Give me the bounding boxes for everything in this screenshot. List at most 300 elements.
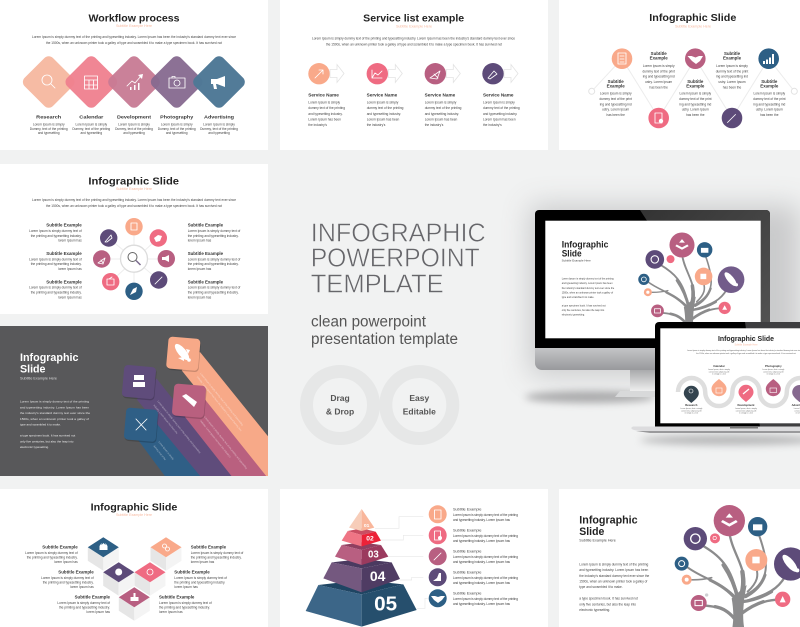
item labels	[453, 508, 482, 596]
heading: Slide	[20, 363, 46, 375]
right labels: lorem Ipsum has	[159, 610, 183, 614]
laptop step text	[680, 368, 800, 414]
item descriptions: Lorem Ipsum is simply dummy text of the printing	[453, 597, 518, 601]
body text: and typesetting industry. Lorem Ipsum has been	[579, 568, 649, 572]
step descriptions: Dummy, text of the printing	[200, 127, 238, 131]
laptop step text: consectetur adipiscing elit	[681, 409, 702, 412]
icon circle: service 1	[308, 63, 330, 84]
column titles	[607, 51, 779, 88]
column descriptions: Lorem Ipsum is simply	[716, 64, 748, 68]
tier 2: 02	[366, 536, 374, 543]
laptop step text: in simply is a text	[739, 412, 753, 414]
service descriptions: dummy text of the printing	[425, 106, 462, 110]
badge: easy editable	[386, 372, 453, 438]
laptop base	[631, 426, 800, 433]
monitor slide heading: Slide	[562, 248, 582, 258]
monitor frame	[535, 210, 770, 348]
body text: Lorem Ipsum is simply dummy text of the printing	[579, 562, 649, 566]
service descriptions: dummy text of the printing	[483, 106, 520, 110]
right labels: Lorem Ipsum is simply dummy text of	[188, 286, 240, 290]
device shadows	[525, 205, 800, 445]
right labels: the printing and typesetting industry.	[191, 556, 242, 560]
center subheading: clean powerpoint	[311, 314, 427, 331]
item descriptions	[453, 513, 518, 606]
step labels: Research	[36, 114, 62, 120]
laptop step text: in simply is a text	[712, 372, 726, 376]
service descriptions: and typesetting industry.	[308, 112, 343, 116]
node 3	[158, 250, 175, 267]
laptop slide text: the 1500s, when an unknown printer took a galley of type and scrambled it to make a type specimen book. It has survived not	[696, 352, 796, 355]
end node right	[791, 88, 797, 94]
item labels: Subtitle Example	[453, 528, 482, 532]
body text	[579, 562, 650, 612]
column descriptions: ustry. Lorem Ipsum	[682, 108, 709, 112]
column titles: Subtitle	[761, 79, 778, 84]
right labels	[159, 544, 243, 614]
subtitle: Subtitle Example Here	[579, 539, 616, 543]
intro text: the 1500s, when an unknown printer took a galley of type and scrambled it to make a type specimen book. It has survived not	[46, 204, 222, 208]
monitor tree	[638, 232, 744, 322]
service descriptions: Lorem Ipsum is simply	[308, 100, 340, 104]
intro text	[32, 198, 236, 208]
node: note	[745, 549, 767, 571]
spokes	[102, 227, 166, 291]
left labels: Subtitle Example	[75, 595, 111, 600]
node 8	[100, 229, 117, 247]
ribbons: Lorem Ipsum is simply	[158, 441, 175, 461]
monitor	[535, 210, 770, 397]
panel: radial hub	[0, 164, 268, 314]
node: phone	[684, 527, 707, 550]
left labels	[25, 544, 111, 614]
column titles: Subtitle	[608, 79, 624, 84]
laptop step text: Lorem Ipsum, dest a simply	[735, 407, 757, 410]
heading: Infographic Slide	[649, 12, 736, 24]
monitor slide heading: Infographic	[562, 240, 608, 250]
badge: easy editable: Editable	[403, 406, 436, 416]
column descriptions: dummy text of the print	[679, 97, 712, 101]
ribbons	[136, 352, 268, 476]
zigzag line	[592, 59, 794, 118]
pyramid diagram	[306, 509, 428, 627]
laptop slide text	[687, 349, 800, 355]
item labels: Subtitle Example	[453, 508, 482, 512]
item labels: Subtitle Example	[453, 570, 482, 574]
left labels: Subtitle Example	[58, 570, 94, 574]
right labels: the printing and typesetting industry.	[174, 580, 225, 584]
step descriptions: Dummy, text of the printing	[72, 127, 110, 131]
service names: Service Name	[425, 92, 456, 98]
node: layers	[714, 505, 745, 536]
card: rocket	[166, 336, 201, 372]
tier 1: 01	[364, 523, 370, 529]
column descriptions: dummy text of the print	[753, 97, 786, 101]
badge: drag and drop: Drag	[330, 393, 350, 403]
ribbons: Lorem Ipsum is simply dummy text of the printing and typesetting	[203, 416, 248, 470]
column descriptions: Lorem Ipsum is simply	[643, 64, 675, 68]
column descriptions: has been the	[649, 85, 668, 89]
small dot	[705, 593, 708, 597]
service descriptions: Lorem Ipsum has been	[367, 118, 400, 122]
service descriptions: dummy text of the printing	[308, 106, 345, 110]
heading: Infographic Slide	[91, 502, 177, 514]
monitor slide subtitle: Subtitle Example Here	[562, 259, 591, 263]
left labels: Subtitle Example	[46, 222, 82, 228]
item descriptions: and typesetting industry. Lorem Ipsum has	[453, 560, 510, 564]
panel: service list	[280, 0, 548, 150]
column descriptions: has been the	[606, 113, 625, 117]
ribbons: Lorem Ipsum is simply dummy text of the printing and typesetting	[199, 372, 244, 427]
icon circle: document	[612, 48, 632, 69]
monitor slide text: and typesetting industry. Lorem Ipsum has been	[562, 282, 613, 285]
left labels: Lorem Ipsum is simply dummy text of	[41, 576, 94, 580]
laptop	[631, 322, 800, 433]
diamond: advertising	[191, 54, 247, 110]
subtitle: Subtitle Example Here	[116, 513, 152, 517]
laptop step labels: Development	[738, 403, 755, 407]
center heading: TEMPLATE	[311, 269, 444, 299]
monitor slide text: the industry's standard dummy text ever since the	[562, 287, 615, 290]
node: chat	[675, 557, 689, 571]
laptop step labels: Calendar	[713, 364, 725, 368]
node: star	[682, 575, 692, 585]
diamond: research	[20, 54, 77, 110]
column descriptions: ing and typesetting ind	[643, 75, 675, 79]
tier 4: 04	[370, 568, 386, 584]
service descriptions: Lorem Ipsum has been	[483, 118, 516, 122]
node 2	[150, 229, 167, 247]
column titles: Subtitle	[724, 51, 741, 56]
node 5	[125, 283, 143, 300]
right labels	[188, 222, 240, 299]
body text: only five centuries, but also the leap into	[20, 439, 74, 443]
ribbons: Lorem Ipsum is simply dummy text of the printing and typesetting	[157, 400, 202, 455]
left labels: Lorem Ipsum is simply dummy text of	[29, 229, 82, 233]
left labels: the printing and typesetting industry.	[31, 262, 82, 266]
service descriptions: the industry's	[483, 123, 502, 127]
left labels: the printing and typesetting industry.	[27, 556, 78, 560]
node 4	[150, 271, 167, 289]
right labels: lorem Ipsum has	[174, 585, 198, 589]
node 6	[102, 273, 119, 290]
service descriptions: Lorem Ipsum is simply	[425, 100, 457, 104]
node: folder	[748, 517, 767, 536]
subtitle: Subtitle Example Here	[20, 376, 57, 380]
item descriptions: Lorem Ipsum is simply dummy text of the printing	[453, 513, 518, 517]
monitor stand	[615, 370, 680, 397]
service descriptions: and typesetting industry.	[483, 112, 517, 116]
body text: the industry's standard dummy text ever since the	[579, 574, 650, 578]
laptop step text: consectetur adipiscing elit	[736, 409, 757, 412]
node: search	[710, 533, 720, 543]
body text	[20, 400, 90, 449]
node: people	[775, 592, 790, 607]
column titles: Example	[723, 56, 742, 60]
left labels: lorem Ipsum has	[70, 585, 94, 589]
monitor slide text: type and scrambled it to make.	[562, 296, 595, 299]
column descriptions: dummy text of the print	[599, 97, 632, 101]
tier 5: 05	[374, 592, 397, 615]
laptop slide subtitle: Subtitle Example Here	[734, 344, 758, 347]
column descriptions: ing and typesetting ind	[679, 102, 711, 106]
column descriptions: ustry. Lorem Ipsum	[756, 108, 783, 112]
left labels: the printing and typesetting industry.	[31, 290, 82, 294]
tier 3: 03	[368, 550, 379, 561]
service descriptions: Lorem Ipsum is simply	[483, 100, 515, 104]
service descriptions: the industry's	[367, 123, 386, 127]
icon circle: handshake	[685, 48, 706, 69]
pin: development	[738, 385, 754, 402]
column descriptions: ustry. Lorem Ipsum	[718, 80, 746, 84]
column descriptions: Lorem Ipsum is simply	[600, 92, 632, 96]
icon circle: clipboard	[648, 108, 669, 128]
panel: zigzag timeline	[559, 0, 800, 150]
icon circle: document	[429, 505, 447, 523]
service descriptions: and typesetting industry.	[367, 112, 401, 116]
center heading: POWERPOINT	[311, 243, 480, 273]
step descriptions: Lorem Ipsum is simply	[33, 122, 65, 126]
monitor slide text: only five centuries, but also the leap into	[562, 309, 605, 312]
column descriptions: ing and typesetting ind	[753, 102, 785, 106]
cube: purple	[103, 562, 134, 596]
heading: service list example: Service list example	[363, 12, 464, 24]
column titles: Example	[607, 84, 625, 88]
center subheading	[311, 314, 458, 348]
service descriptions: the industry's	[425, 123, 444, 127]
icon circle: pencil	[429, 547, 447, 565]
diamond: calendar	[63, 54, 120, 110]
column descriptions: dummy text of the print	[642, 69, 675, 73]
item labels: Subtitle Example	[453, 592, 482, 596]
right labels: the printing and typesetting industry.	[188, 290, 239, 294]
column titles: Subtitle	[687, 79, 704, 84]
icon circle: service 3	[425, 63, 446, 84]
step descriptions: Lorem Ipsum is simply	[161, 122, 193, 126]
laptop screen	[660, 328, 800, 423]
body text: and typesetting industry. Lorem Ipsum has been	[20, 405, 89, 409]
column descriptions	[599, 64, 786, 117]
right labels: Lorem Ipsum is simply dummy text of	[188, 257, 240, 261]
item descriptions: and typesetting industry. Lorem Ipsum has	[453, 518, 510, 522]
right labels: the printing and typesetting industry.	[188, 262, 239, 266]
item descriptions: and typesetting industry. Lorem Ipsum has	[453, 602, 510, 606]
ribbons: industry. Lorem Ipsum has been the	[153, 404, 179, 435]
panel: workflow process	[0, 0, 268, 150]
laptop step text: in simply is a text	[766, 372, 781, 376]
service names: Service Name	[308, 92, 339, 98]
right labels: Lorem Ipsum is simply dummy text of	[188, 229, 240, 233]
node 7	[93, 250, 110, 268]
panel: isometric cubes	[0, 489, 268, 627]
icon circle: chart	[429, 568, 447, 586]
column titles: Example	[760, 84, 779, 88]
subtitle: Subtitle Example Here	[396, 24, 432, 28]
laptop step text: Lorem Ipsum, dest a simply	[680, 407, 702, 410]
pin: calendar	[712, 379, 726, 396]
node: rocket	[774, 547, 800, 581]
cube: orange	[150, 537, 182, 571]
ribbons: industry. Lorem Ipsum has been the industry's standard dummy text	[196, 376, 242, 432]
ribbons: industry. Lorem Ipsum has been the industry's	[199, 420, 232, 459]
body text: electronic typesetting.	[579, 608, 610, 612]
intro text: the 1500s, when an unknown printer took a galley of type and scrambled it to make a type specimen book. It has survived not	[46, 41, 222, 45]
center subheading: presentation template	[311, 331, 458, 348]
service names	[308, 92, 514, 98]
node 1	[125, 218, 143, 235]
left labels: lorem Ipsum has	[86, 610, 110, 614]
service descriptions: Lorem Ipsum is simply	[367, 100, 399, 104]
arrows	[330, 64, 518, 82]
left labels: lorem Ipsum has	[58, 267, 82, 271]
heading: Infographic Slide	[88, 176, 179, 188]
step labels: Calendar	[79, 114, 104, 120]
column descriptions: ing and typesetting ind	[600, 102, 632, 106]
left labels	[29, 222, 82, 299]
step descriptions: and typesetting	[208, 131, 230, 135]
pin: photography	[766, 379, 781, 396]
heading: Infographic	[579, 514, 638, 526]
step labels: Advertising	[204, 114, 234, 120]
right labels: the printing and typesetting industry.	[188, 234, 239, 238]
laptop step labels	[685, 364, 800, 407]
item descriptions: and typesetting industry. Lorem Ipsum has	[453, 581, 510, 585]
item descriptions: Lorem Ipsum is simply dummy text of the printing	[453, 534, 518, 538]
step descriptions: Dummy, text of the printing	[30, 127, 68, 131]
icon circle: pencil	[722, 108, 742, 128]
left labels: Subtitle Example	[42, 544, 78, 550]
service names: Service Name	[483, 92, 514, 98]
body text: type and scrambled it to make.	[579, 585, 623, 589]
laptop slide heading: Infographic Slide	[718, 336, 774, 343]
right labels: lorem Ipsum has	[188, 238, 212, 242]
body text: a type specimen book. It has survived not	[579, 596, 638, 600]
icon circle: clipboard	[429, 526, 447, 544]
cube: pink	[119, 587, 150, 621]
right labels: Lorem Ipsum is simply dummy text of	[159, 601, 212, 605]
heading: Slide	[579, 526, 604, 538]
left labels: lorem Ipsum has	[58, 295, 82, 299]
card: inbox	[122, 365, 157, 401]
laptop frame	[655, 322, 800, 427]
right labels: lorem Ipsum has	[191, 560, 215, 564]
left labels: Lorem Ipsum is simply dummy text of	[29, 286, 82, 290]
right labels: the printing and typesetting industry.	[159, 606, 210, 610]
center heading: INFOGRAPHIC	[311, 218, 486, 248]
tree diagram	[675, 505, 800, 627]
card: tools	[124, 407, 159, 443]
step labels	[36, 114, 234, 120]
step labels: Development	[117, 114, 152, 120]
connectors	[375, 517, 428, 608]
heading	[579, 514, 638, 538]
column titles: Subtitle	[651, 51, 667, 56]
service descriptions: Lorem Ipsum has been	[308, 118, 341, 122]
subtitle: Subtitle Example Here	[675, 24, 711, 28]
right labels: Subtitle Example	[174, 570, 210, 574]
right labels: Subtitle Example	[191, 544, 227, 550]
step descriptions: and typesetting	[123, 131, 145, 135]
column descriptions: has been the	[760, 113, 779, 117]
column descriptions: ustry. Lorem Ipsum	[602, 108, 630, 112]
heading	[20, 352, 78, 375]
laptop step text: consectetur adipiscing elit	[709, 370, 730, 373]
laptop step text: consectetur adipiscing elit	[763, 370, 784, 373]
step descriptions: Dummy, text of the printing	[115, 127, 153, 131]
intro text: Lorem Ipsum is simply dummy text of the printing and typesetting industry. Lorem Ipsum has been the industry's standard dummy text ever since	[32, 35, 236, 39]
heading: Infographic	[20, 352, 78, 364]
left labels: Lorem Ipsum is simply dummy text of	[29, 257, 82, 261]
service descriptions: and typesetting industry.	[425, 112, 459, 116]
column descriptions: ing and typesetting ind	[716, 75, 748, 79]
cube: red	[134, 562, 166, 596]
step descriptions: Dummy, text of the printing	[158, 127, 196, 131]
laptop wave track	[678, 378, 800, 406]
tree branches	[687, 532, 785, 627]
panel: tree	[559, 489, 800, 627]
monitor slide text: electronic typesetting.	[562, 314, 585, 316]
pin: advertising	[792, 385, 800, 402]
right labels: Subtitle Example	[159, 595, 195, 600]
step descriptions: and typesetting	[38, 131, 60, 135]
monitor slide heading	[562, 240, 608, 258]
step descriptions: and typesetting	[80, 131, 102, 135]
body text: Lorem Ipsum is simply dummy text of the printing	[20, 400, 89, 404]
icon circle: service 2	[367, 63, 388, 84]
column descriptions: has been the	[686, 113, 705, 117]
left labels: Lorem Ipsum is simply dummy text of	[25, 551, 78, 555]
body text: a type specimen book. It has survived not	[20, 434, 75, 438]
right labels: Lorem Ipsum is simply dummy text of	[174, 576, 227, 580]
step descriptions: and typesetting	[166, 131, 188, 135]
monitor slide text	[562, 278, 615, 316]
body text: type and scrambled it to make.	[20, 422, 61, 426]
left labels: lorem Ipsum has	[58, 238, 82, 242]
monitor chin	[535, 348, 770, 370]
service descriptions: the industry's	[308, 123, 327, 127]
left labels: Subtitle Example	[46, 251, 82, 256]
step descriptions: Lorem Ipsum is simply	[203, 122, 235, 126]
step descriptions: Lorem Ipsum is simply	[118, 122, 150, 126]
item descriptions: Lorem Ipsum is simply dummy text of the printing	[453, 576, 518, 580]
panel: dark slide with ribbons	[0, 326, 268, 476]
right labels: lorem Ipsum has	[188, 295, 212, 299]
body text: only five centuries, but also the leap into	[579, 602, 636, 606]
intro text: Lorem Ipsum is simply dummy text of the printing and typesetting industry. Lorem Ipsum has been the industry's standard dummy text ever since	[32, 198, 236, 202]
column titles: Example	[650, 56, 668, 60]
step descriptions	[30, 122, 238, 135]
right labels: Subtitle Example	[188, 222, 224, 228]
node: briefcase	[691, 595, 707, 611]
laptop step labels: Photography	[765, 364, 782, 368]
icon circle: handshake	[429, 589, 447, 607]
monitor slide text: Lorem Ipsum is simply dummy text of the printing	[562, 278, 614, 280]
heading: workflow process: Workflow process	[88, 12, 180, 24]
column descriptions: has been the	[723, 85, 741, 89]
badge: drag and drop	[306, 372, 374, 438]
intro text: Lorem Ipsum is simply dummy text of the printing and typesetting industry. Lorem Ipsum has been the industry's standard dummy text ever since	[312, 36, 515, 40]
left labels: the printing and typesetting industry.	[59, 606, 110, 610]
body text: 1500s, when an unknown printer took a galley of	[20, 417, 89, 421]
monitor screen	[545, 221, 761, 338]
center heading	[311, 218, 486, 299]
left labels: lorem Ipsum has	[54, 560, 78, 564]
ribbons: dummy text of the	[153, 445, 167, 462]
right labels: lorem Ipsum has	[188, 267, 212, 271]
panel: pyramid	[280, 489, 548, 627]
intro text: the 1500s, when an unknown printer took a galley of type and scrambled it to make a type specimen book. It has survived not	[326, 42, 502, 46]
body text: electronic typesetting.	[20, 445, 49, 449]
step descriptions: Lorem Ipsum is simply	[75, 122, 108, 126]
